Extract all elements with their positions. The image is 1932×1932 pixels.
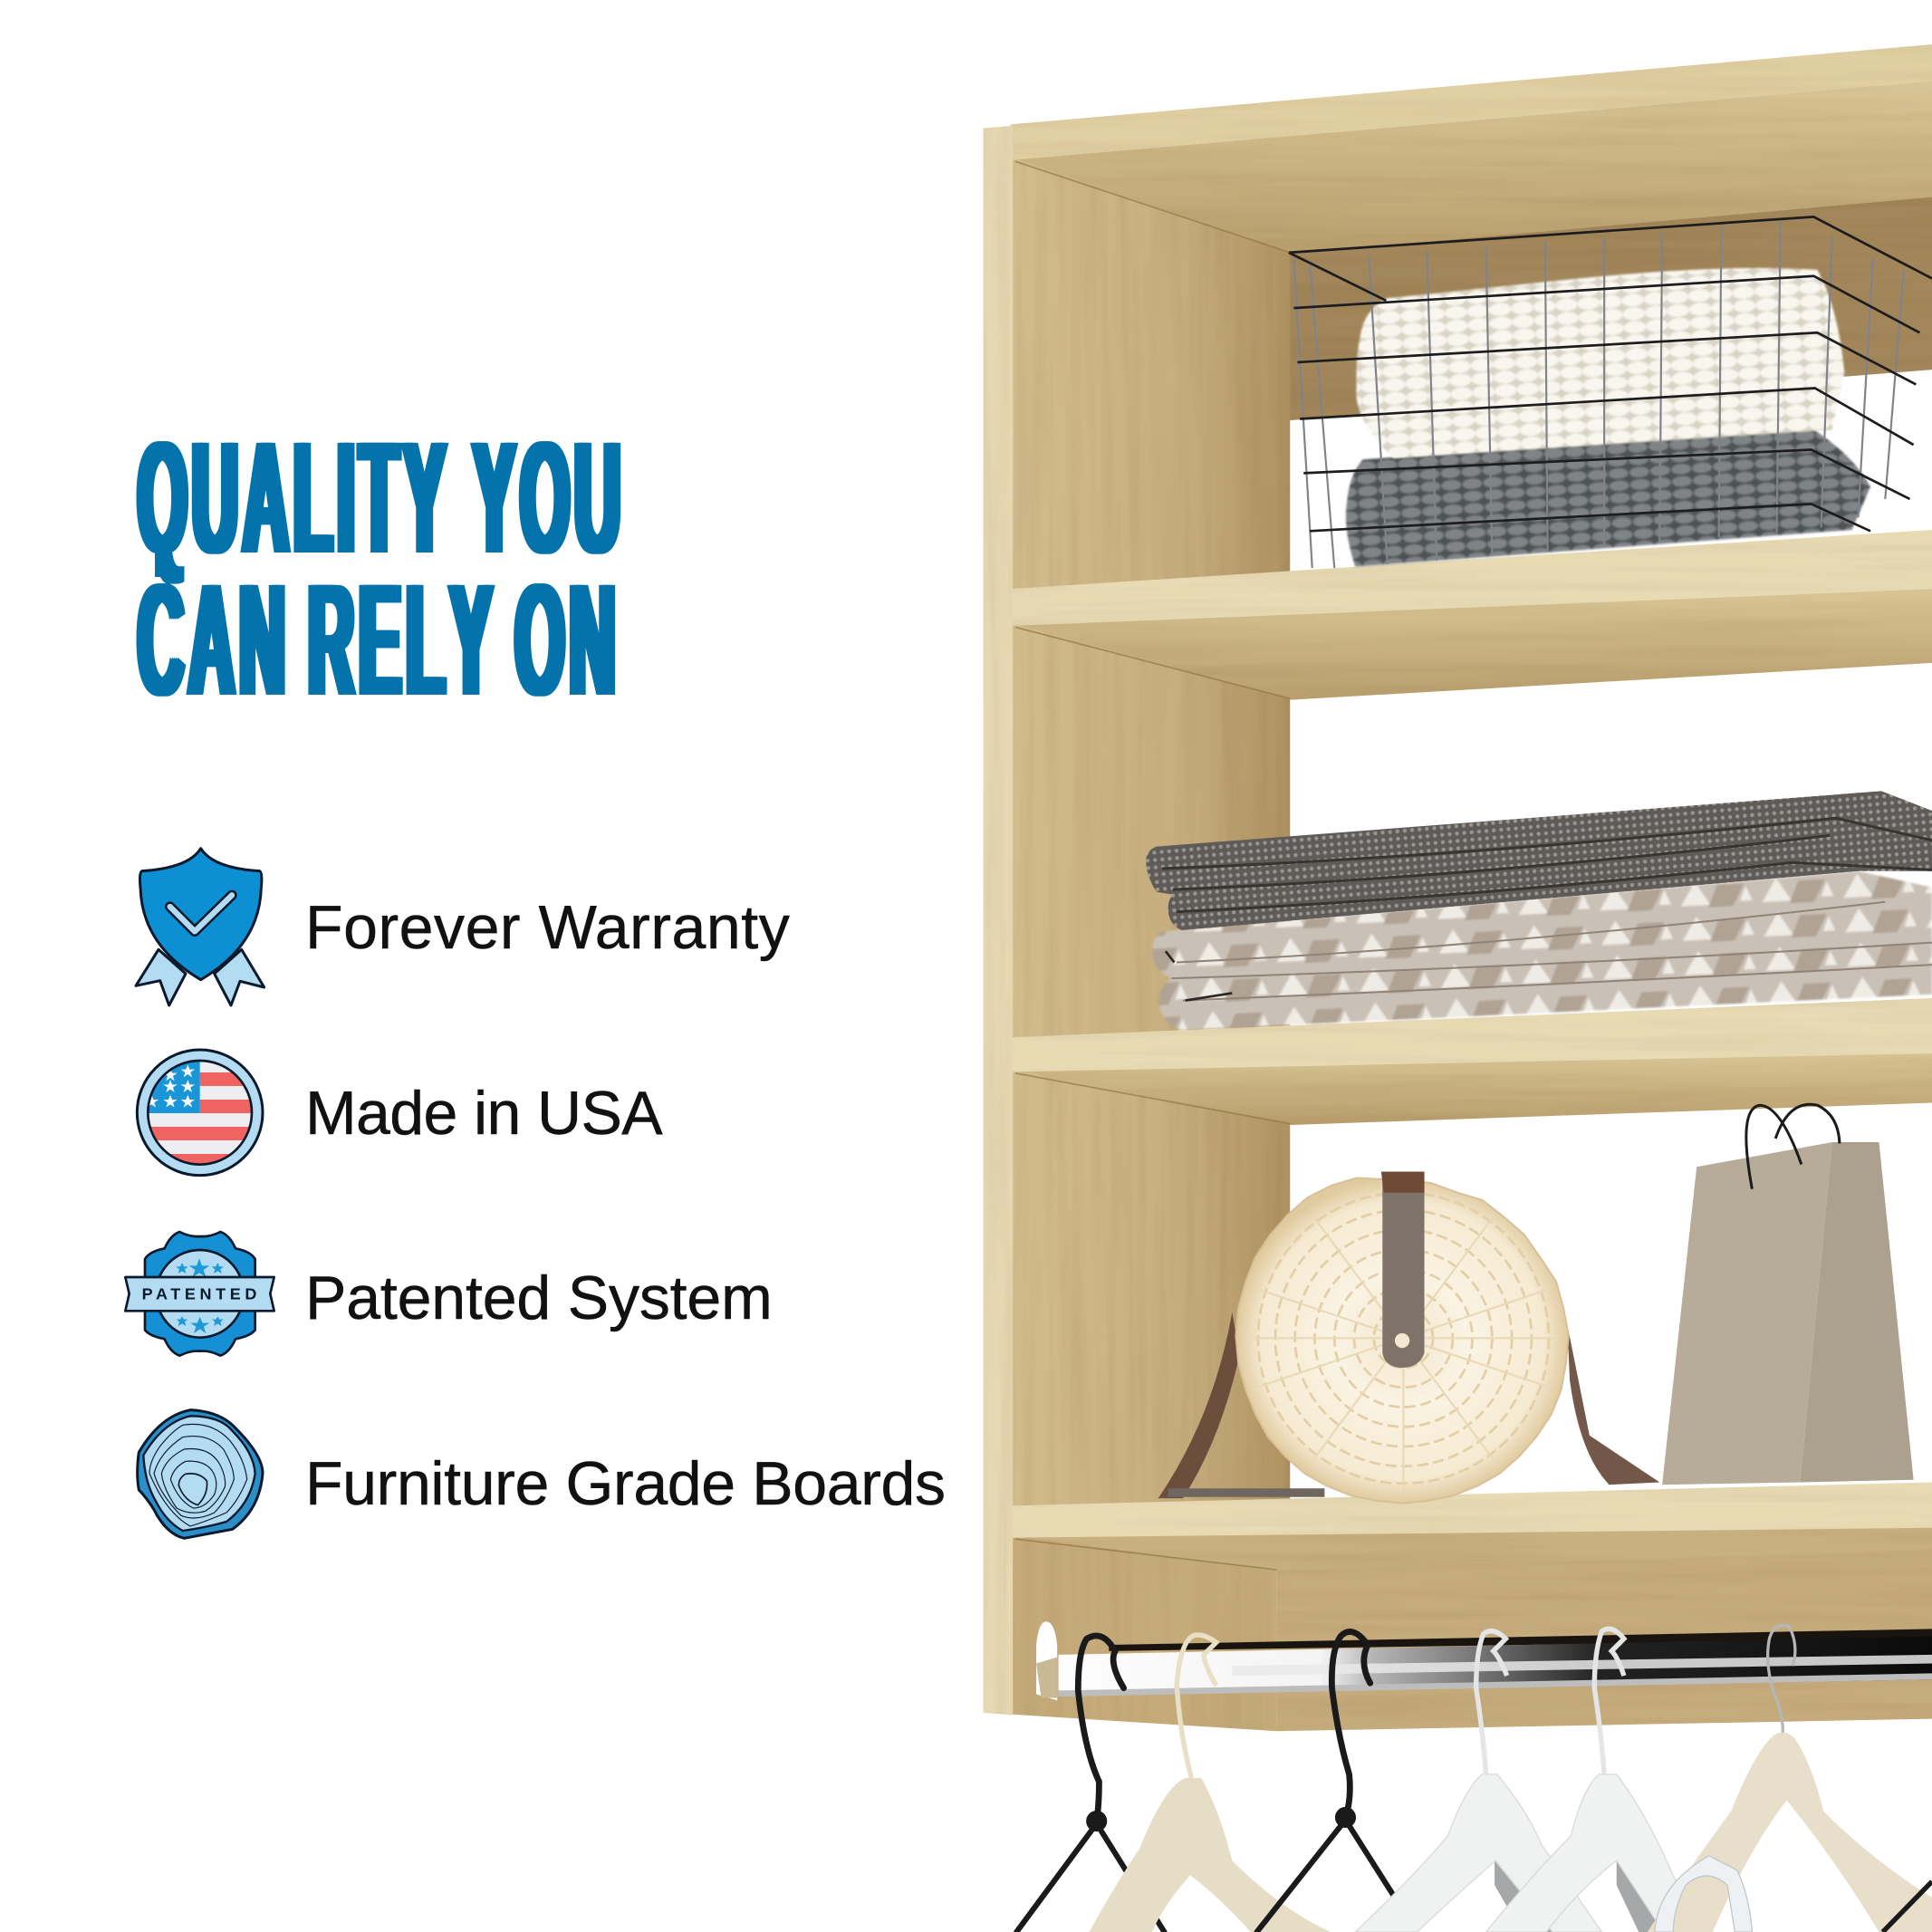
wire basket [1289,216,1932,568]
heading Q tail [155,553,176,577]
cream hanger 1 [1090,1635,1331,1932]
icons [124,553,275,1540]
paper shopping bag [1662,1104,1914,1485]
round wicker bag [1158,1172,1659,1504]
feature: patented system: Patented System [305,1264,773,1332]
hanging rail [1036,1621,1932,1700]
white hanger 1 [1355,1631,1601,1932]
shelf undersides [1013,79,1932,1571]
icon: wood rings [138,1410,263,1538]
shelf front edges [1010,44,1932,1538]
black hanger 2 [1257,1631,1395,1932]
folded grey blanket [1146,791,1932,930]
heading: second line: CAN RELY ON [138,552,620,729]
icon: warranty shield [136,849,264,1005]
black hanger 1 [1016,1636,1165,1932]
cream hanger 2 with garment strap [1648,1625,1932,1932]
icon: patented seal: PATENTED [142,1284,256,1302]
shelf side seams [1015,161,1290,1570]
grey knit towel [1346,425,1870,567]
feature: made in USA: Made in USA [305,1079,662,1148]
icon: patented seal [125,1232,274,1356]
white hanger 2 [1486,1629,1700,1932]
left outer edge of unit [984,126,1013,1716]
back wall boards [1276,191,1932,1731]
folded patterned blanket [1152,871,1932,1030]
white knit towel [1356,268,1844,458]
icon: USA flag badge [137,1050,263,1176]
heading: first line: QUALITY YOU [138,409,625,587]
feature: forever warranty: Forever Warranty [305,893,790,962]
feature: furniture grade boards: Furniture Grade Boards [305,1449,946,1518]
inner side panels [985,155,1290,1731]
